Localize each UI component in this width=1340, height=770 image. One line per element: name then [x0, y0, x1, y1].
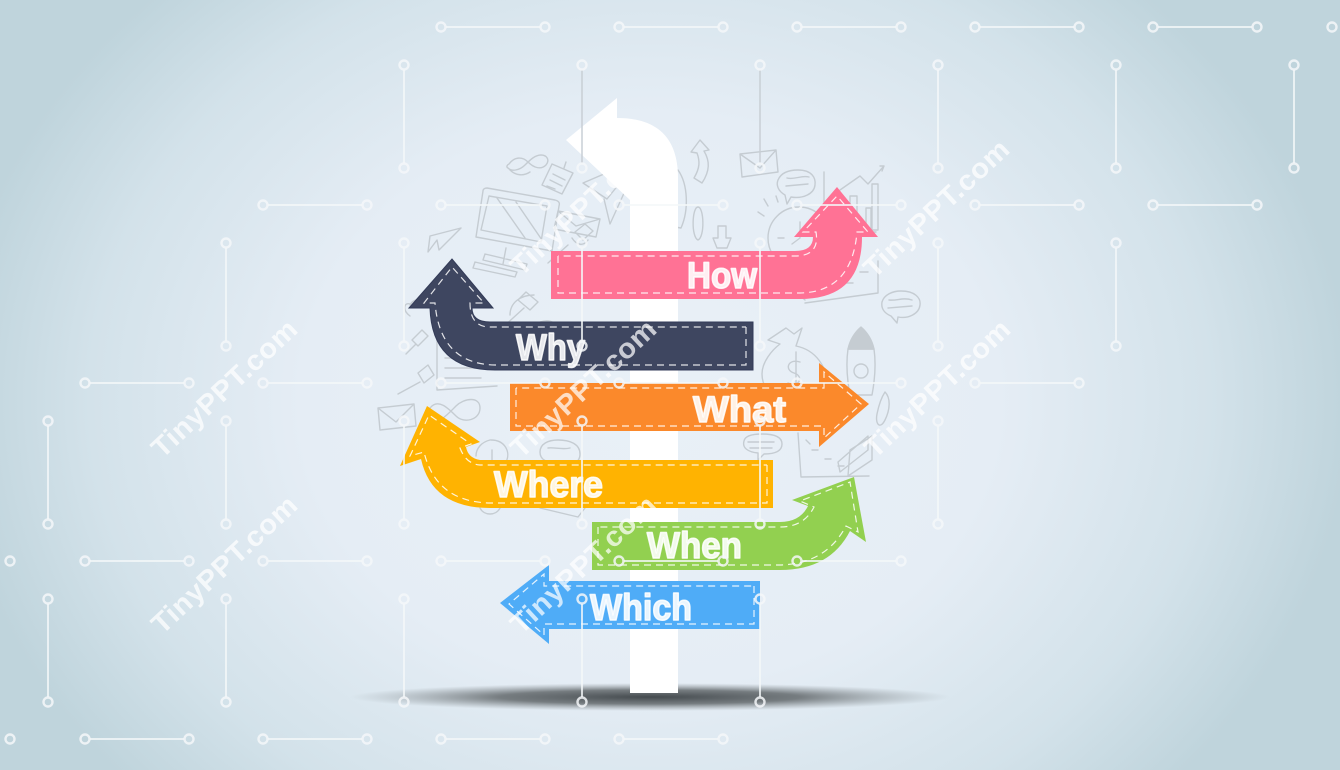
icon: growth chart [824, 166, 884, 232]
watermarks: TinyPPT.com [504, 131, 663, 282]
icon: speech bubble lower [882, 291, 920, 323]
arrow: How [551, 187, 878, 299]
label: When: When [647, 525, 742, 566]
icon: numbered box [794, 261, 878, 303]
icon: speech bubble center [744, 434, 782, 460]
watermarks: TinyPPT.com [504, 489, 663, 640]
arrow: Which [500, 565, 760, 644]
arrow: Where [400, 406, 773, 508]
arrow: When [592, 477, 866, 570]
icon: curved arrow [691, 140, 709, 183]
label: Which: Which [590, 587, 692, 628]
icon: rocket sketch [675, 170, 686, 228]
watermarks: TinyPPT.com [858, 313, 1017, 464]
icon: rocket [848, 327, 874, 349]
icon: document [437, 340, 497, 390]
icon: ink bottle [693, 207, 731, 248]
icon: speech bubble [777, 170, 815, 204]
icon: speech bubble low [540, 440, 580, 465]
icon: lightbulb [476, 440, 508, 462]
label: Why: Why [516, 327, 585, 368]
watermarks: TinyPPT.com [145, 489, 304, 640]
label: Where: Where [494, 464, 603, 505]
icon: paper planes [428, 159, 639, 252]
watermarks: TinyPPT.com [504, 313, 663, 464]
signpost: white curved arrow pole [566, 98, 678, 692]
icon: clock [768, 207, 830, 269]
icon: envelope right [740, 150, 778, 177]
arrow: Why [409, 259, 753, 370]
icon: bottom scribbles [480, 508, 585, 517]
arrow: What [510, 363, 869, 447]
icon: gauge and pins left [502, 292, 562, 337]
watermarks: TinyPPT.com [145, 313, 304, 464]
icon: stairs note [798, 433, 872, 477]
icon: monitor [473, 188, 559, 277]
label: How: How [687, 255, 757, 296]
label: What: What [693, 389, 786, 430]
doodle illustrations [378, 140, 920, 517]
icon: money bag [762, 328, 826, 400]
icon: pushpins [548, 224, 593, 263]
icon: envelope [554, 211, 600, 237]
pole base [630, 650, 678, 693]
watermarks: TinyPPT.com [857, 133, 1016, 284]
icon: note [542, 162, 573, 194]
icon: infinity [507, 155, 548, 175]
shadow under post [350, 683, 950, 711]
icon: infinity lower [430, 400, 480, 421]
watermarks [145, 131, 1017, 640]
